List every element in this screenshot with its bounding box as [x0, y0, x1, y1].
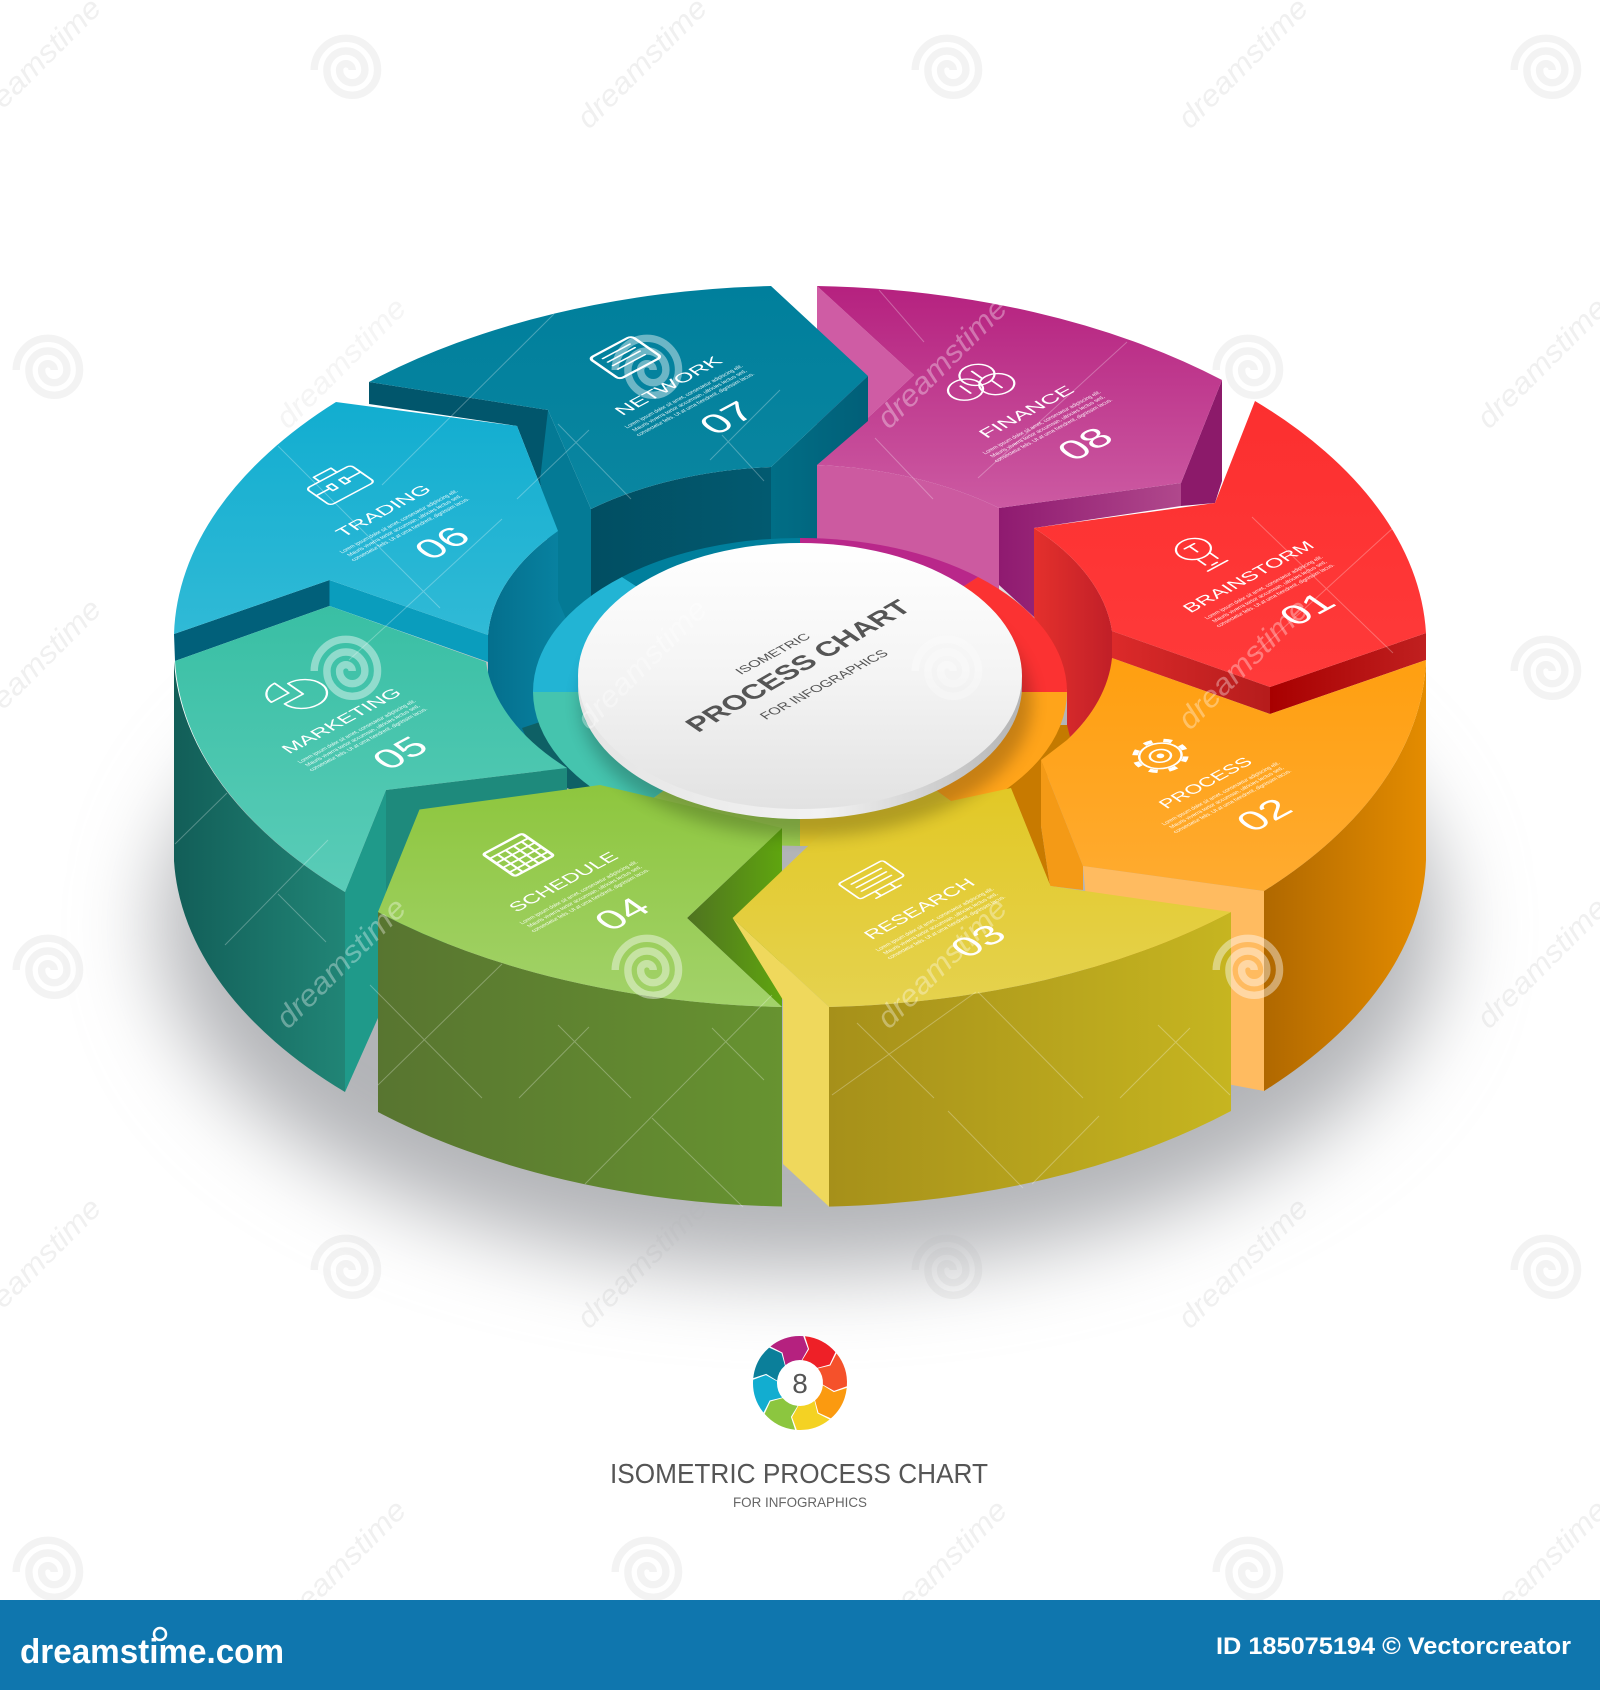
- centre disc title: PROCESS CHART: [678, 595, 917, 736]
- icon: calendar grid: [483, 833, 554, 876]
- label 06 trading: Mauris viverra tortor accumsan, ultricies lectus sed,: [346, 494, 464, 558]
- bottom title: [610, 1458, 988, 1510]
- label 07 network: 07: [690, 395, 764, 440]
- label 05 marketing: Lorem ipsum dolor sit amet, consectetur adipiscing elit.: [296, 699, 418, 765]
- label 06 trading: consectetur felis. Ut at urna hendrerit, dignissim lacus.: [350, 497, 472, 563]
- label 02 process: PROCESS: [1154, 754, 1257, 811]
- bottom title: FOR INFOGRAPHICS: [733, 1494, 867, 1510]
- label 01 brainstorm: 01: [1270, 586, 1344, 631]
- drop shadow under chart: [160, 580, 1440, 1270]
- label 01 brainstorm: [1128, 503, 1378, 657]
- label 08 finance: Lorem ipsum dolor sit amet, consectetur adipiscing elit.: [981, 390, 1103, 456]
- label 08 finance: Mauris viverra tortor accumsan, ultricies lectus sed,: [989, 395, 1107, 459]
- dark hole floor right: [1000, 725, 1072, 800]
- label 02 process: consectetur felis. Ut at urna hendrerit, dignissim lacus.: [1172, 769, 1294, 835]
- label 08 finance: consectetur felis. Ut at urna hendrerit, dignissim lacus.: [993, 398, 1115, 464]
- label 07 network: Mauris viverra tortor accumsan, ultricies lectus sed,: [631, 369, 749, 433]
- centre disc shadow: [580, 569, 1032, 837]
- icon: pie chart: [257, 669, 337, 718]
- label 04 schedule: [448, 811, 689, 960]
- small circular logo with 8 arrows: [743, 1326, 857, 1440]
- label 05 marketing: 05: [363, 730, 437, 775]
- label 06 trading: [268, 440, 509, 589]
- segment 08 finance solid: [817, 286, 1222, 620]
- watermark layer over chart: dreamstime: [571, 593, 714, 736]
- label 07 network: NETWORK: [610, 353, 727, 418]
- label 04 schedule: Lorem ipsum dolor sit amet, consectetur adipiscing elit.: [518, 860, 640, 926]
- watermark layer over chart: dreamstime: [1172, 593, 1315, 736]
- icon: gear: [1124, 734, 1196, 778]
- label 01 brainstorm: Mauris viverra tortor accumsan, ultricies lectus sed,: [1211, 560, 1329, 624]
- label 04 schedule: SCHEDULE: [504, 849, 623, 915]
- label 07 network: [554, 315, 794, 464]
- label 01 brainstorm: BRAINSTORM: [1178, 538, 1319, 615]
- label 05 marketing: consectetur felis. Ut at urna hendrerit, dignissim lacus.: [308, 707, 430, 773]
- label 06 trading: 06: [405, 520, 479, 565]
- watermark layer on background: dreamstime: [1172, 0, 1315, 135]
- watermark layer over chart: dreamstime: [871, 892, 1014, 1035]
- segment 05 marketing solid: [174, 606, 567, 1092]
- watermark layer on background: dreamstime: [1172, 1192, 1315, 1335]
- label 07 network: consectetur felis. Ut at urna hendrerit, dignissim lacus.: [635, 372, 757, 438]
- label 03 research: [806, 839, 1045, 987]
- label 08 finance: 08: [1048, 421, 1122, 466]
- label 08 finance: FINANCE: [974, 383, 1079, 441]
- label 01 brainstorm: Lorem ipsum dolor sit amet, consectetur adipiscing elit.: [1203, 555, 1325, 621]
- label 04 schedule: consectetur felis. Ut at urna hendrerit, dignissim lacus.: [530, 868, 652, 934]
- label 03 research: 03: [941, 918, 1015, 963]
- icon: server list: [589, 336, 661, 379]
- label 06 trading: TRADING: [331, 482, 436, 540]
- footer brand: dreamstime.com: [20, 1633, 284, 1671]
- watermark layer over chart: dreamstime: [270, 292, 413, 435]
- label 02 process: Lorem ipsum dolor sit amet, consectetur adipiscing elit.: [1160, 761, 1282, 827]
- label 07 network: Lorem ipsum dolor sit amet, consectetur adipiscing elit.: [623, 364, 745, 430]
- watermark layer over chart: dreamstime: [871, 292, 1014, 435]
- footer image id: ID 185075194 © Vectorcreator: [1216, 1633, 1571, 1660]
- watermark layer over chart: dreamstime: [270, 892, 413, 1035]
- label 05 marketing: MARKETING: [277, 685, 406, 756]
- label 04 schedule: 04: [585, 891, 659, 936]
- label 02 process: Mauris viverra tortor accumsan, ultricies lectus sed,: [1168, 766, 1286, 830]
- label 05 marketing: Mauris viverra tortor accumsan, ultricies lectus sed,: [304, 704, 422, 768]
- watermark layer over chart: [270, 292, 1315, 1035]
- segment 07 network solid: [369, 286, 868, 630]
- label 01 brainstorm: consectetur felis. Ut at urna hendrerit, dignissim lacus.: [1215, 563, 1337, 629]
- label 05 marketing: [224, 648, 467, 799]
- dark hole floor left: [522, 700, 640, 815]
- label 03 research: Lorem ipsum dolor sit amet, consectetur adipiscing elit.: [874, 887, 996, 953]
- label 03 research: Mauris viverra tortor accumsan, ultricies lectus sed,: [882, 892, 1000, 956]
- watermark layer on background: dreamstime: [270, 292, 413, 435]
- icon: monitor document: [838, 860, 911, 904]
- segment 01 brainstorm solid: [1034, 401, 1426, 740]
- centre disc title: FOR INFOGRAPHICS: [756, 647, 892, 722]
- label 03 research: RESEARCH: [859, 876, 979, 942]
- centre disc title: ISOMETRIC: [732, 631, 814, 677]
- label 08 finance: [906, 337, 1152, 490]
- segment 04 schedule solid: [378, 785, 782, 1206]
- label 02 process: [1090, 712, 1331, 861]
- centre colour ring: [533, 538, 1067, 846]
- centre disc: [578, 543, 1022, 819]
- label 04 schedule: Mauris viverra tortor accumsan, ultricies lectus sed,: [526, 865, 644, 929]
- segment 02 process solid: [1011, 658, 1426, 1091]
- small circular logo with 8 arrows: 8: [792, 1368, 808, 1399]
- watermark layer on background: dreamstime: [871, 1494, 1014, 1637]
- segment 06 trading solid: [174, 402, 600, 745]
- watermark layer on background: dreamstime: [270, 1494, 413, 1637]
- label 02 process: 02: [1227, 792, 1301, 837]
- bottom title: ISOMETRIC PROCESS CHART: [610, 1458, 988, 1489]
- watermark layer on background: dreamstime: [571, 0, 714, 135]
- watermark layer on background: dreamstime: [571, 1192, 714, 1335]
- icon: briefcase: [300, 461, 375, 506]
- footer bar: [0, 1600, 1600, 1690]
- icon: light bulb: [1169, 534, 1231, 573]
- label 06 trading: Lorem ipsum dolor sit amet, consectetur adipiscing elit.: [338, 489, 460, 555]
- label 03 research: consectetur felis. Ut at urna hendrerit, dignissim lacus.: [886, 895, 1008, 961]
- notch wall of segment 04: [687, 828, 782, 1007]
- segment 03 research solid: [733, 788, 1231, 1207]
- icon: coins: [934, 358, 1021, 411]
- footer brand spiral: [154, 1628, 166, 1640]
